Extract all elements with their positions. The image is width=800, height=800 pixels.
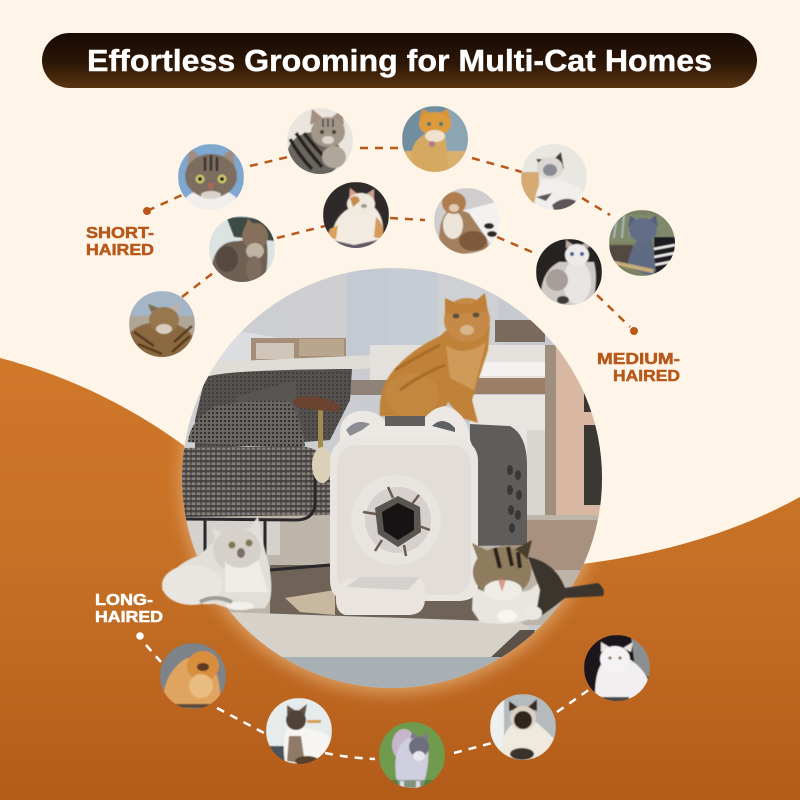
cat photo: short 1 [178,144,244,217]
cat photo: medium 1 [209,216,275,283]
title: Effortless Grooming for Multi-Cat Homes [87,43,712,78]
cat photo: short 5 [609,210,678,279]
rug [225,612,530,660]
label: long-haired [95,592,163,626]
label: short-haired: SHORT- [86,225,154,242]
cat photo: medium 3 [434,188,500,255]
tabby cat (right) [472,540,604,624]
cat photo: long 2 [266,698,332,766]
cat tail tuft [312,447,332,483]
label: medium-haired: MEDIUM- [597,351,680,368]
medium-haired dot [630,327,638,335]
medium-haired path [182,218,630,327]
short-haired dot [143,207,151,215]
orange cat [380,293,490,423]
long-haired dot [136,632,144,640]
label: long-haired: HAIRED [95,609,163,626]
floor [180,515,610,625]
label: short-haired: HAIRED [86,242,154,259]
lower grey [282,657,502,688]
cat photo: short 4 [521,144,587,213]
counter [209,355,370,376]
cat photo: long 5 [584,635,650,702]
grooming device [330,406,478,615]
photo glow [172,441,597,702]
shelf [251,338,346,361]
cat photo: long 1 [160,643,226,710]
short-haired path [147,148,610,215]
title banner [42,33,757,88]
cat photo: long 4 [490,694,556,763]
white cat (left) [162,516,271,610]
sofa back [195,369,352,450]
label: long-haired: LONG- [95,592,153,609]
cat photo: long 3 [379,722,445,790]
cat photo: short 3 [402,106,470,175]
central photo [180,265,610,697]
label: short-haired [86,225,154,259]
cat photo: medium 5 (maine coon) [129,291,195,357]
cat photo: medium 2 [323,182,389,251]
label: medium-haired [597,351,680,385]
label: medium-haired: HAIRED [613,368,680,385]
pillow [236,380,304,438]
cat photo: medium 4 [536,239,602,306]
cat photo: short 2 [287,108,353,178]
long-haired path [146,645,590,759]
orange wave background [0,358,800,800]
carrier [470,424,527,546]
sofa seat [182,446,330,517]
